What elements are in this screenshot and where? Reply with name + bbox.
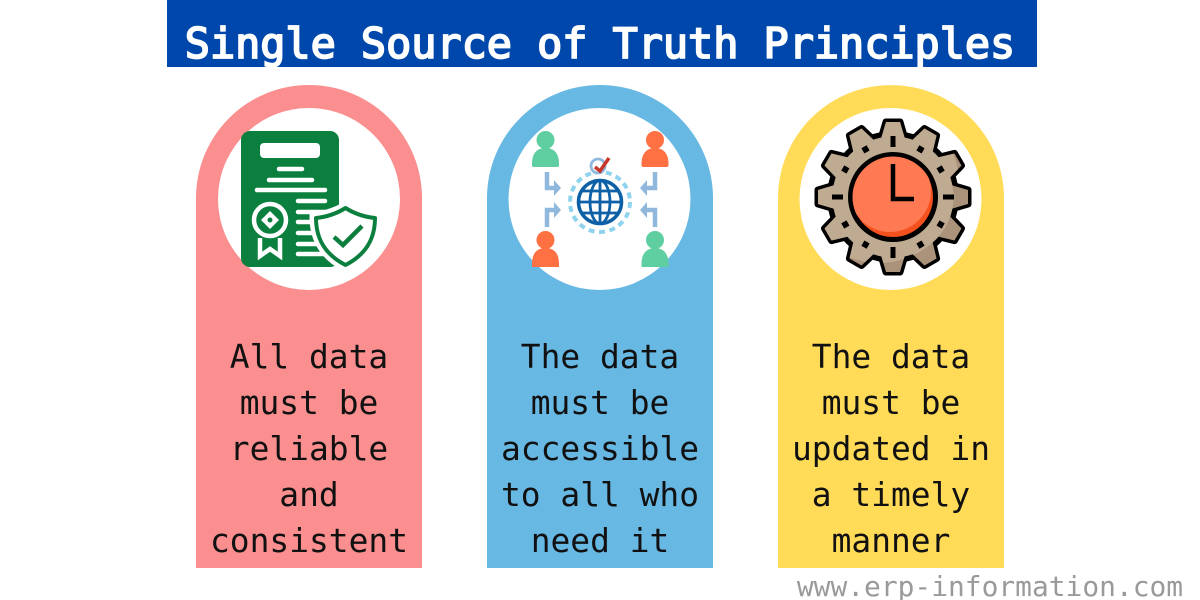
text: panel 1: All data	[230, 337, 388, 376]
text: panel 3: updated in	[792, 429, 990, 468]
text: panel 2: The data	[521, 337, 679, 376]
text: panel 3	[792, 337, 990, 560]
text: panel 3: manner	[832, 521, 950, 560]
panel: updated in a timely manner	[778, 85, 1004, 568]
text: panel 3: must be	[822, 383, 960, 422]
text: panel 2: to all who	[501, 475, 699, 514]
text: panel 2: need it	[531, 521, 669, 560]
text: panel 3: The data	[812, 337, 970, 376]
title banner	[167, 0, 1037, 68]
text: panel 2: accessible	[501, 429, 699, 468]
icon: gear with clock	[818, 122, 968, 272]
text: panel 1: must be	[240, 383, 378, 422]
panel: accessible to all	[487, 85, 713, 568]
title banner: Single Source of Truth Principles	[185, 19, 1015, 68]
text: panel 1	[210, 337, 408, 560]
icon: people around globe	[532, 131, 668, 267]
text: panel 3: a timely	[812, 475, 970, 514]
icon: certificate with shield	[241, 131, 377, 267]
text: panel 2	[501, 337, 699, 560]
text: panel 1: consistent	[210, 521, 408, 560]
text: panel 2: must be	[531, 383, 669, 422]
text: panel 1: reliable	[230, 429, 388, 468]
text: panel 1: and	[279, 475, 339, 514]
panel: reliable and consistent	[196, 85, 422, 568]
